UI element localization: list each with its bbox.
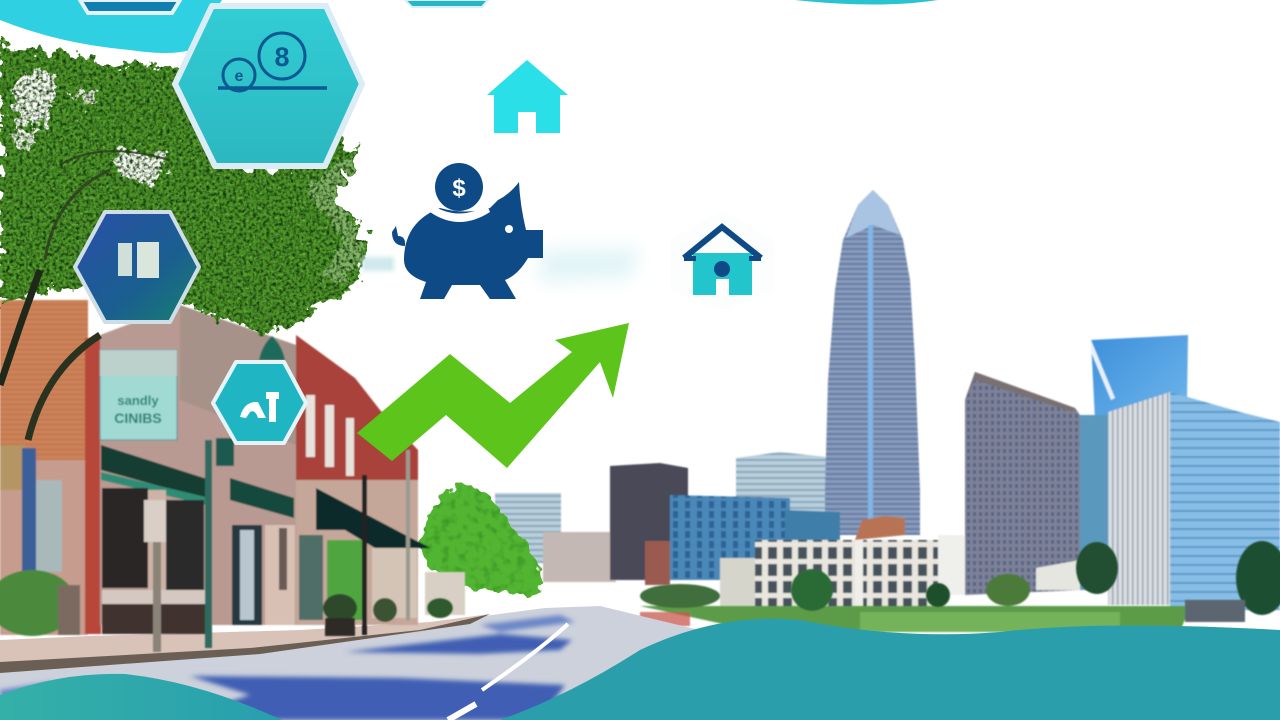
sign post [153, 500, 161, 652]
faint pale smudge left of piggy [362, 257, 394, 271]
corner window [30, 480, 62, 572]
icon: piggy bank [392, 163, 543, 299]
tree trunks [45, 170, 110, 260]
building: low pavilion [1036, 560, 1080, 590]
road shadows [0, 615, 575, 720]
right shop opening [327, 540, 363, 620]
top small hexagon [80, 0, 180, 13]
red brick upper building [296, 335, 418, 490]
road surface [0, 606, 720, 720]
shop sign: CINIBS [114, 410, 162, 426]
storefront row [0, 300, 465, 652]
shop windows [102, 488, 148, 588]
bottom left wave [0, 674, 282, 720]
building: dark tower [610, 463, 688, 580]
road and sidewalk [0, 606, 720, 720]
second awning and door [230, 478, 294, 518]
building: pale glass block [736, 452, 827, 515]
skyline [495, 190, 1280, 610]
lawn [640, 606, 1190, 632]
sidewalk [0, 614, 490, 664]
right lamp post [362, 475, 367, 635]
red pillar and main facade [85, 338, 101, 634]
hexagon: street post [213, 362, 306, 443]
icon: teal house [487, 60, 568, 133]
building: brown low rise [645, 541, 670, 585]
faint pale smudge right of piggy [540, 248, 640, 282]
building: low brick block [543, 532, 616, 582]
top wave band [0, 0, 222, 53]
lane line [482, 624, 568, 690]
curb [0, 614, 490, 673]
icon: house in faint hexagon [670, 210, 775, 312]
icon: building bars [118, 243, 132, 276]
building: angled blue tower [1091, 335, 1188, 420]
tree crown [0, 40, 368, 334]
large tree [0, 40, 368, 440]
shop sign [100, 350, 177, 440]
street tree [420, 484, 545, 596]
coin digit: 8 [274, 42, 290, 72]
skyline trees [791, 569, 833, 611]
building: large blue and white office [1080, 392, 1280, 610]
shop awning [101, 445, 210, 500]
brick corner building [0, 300, 88, 470]
bottom right wave [500, 619, 1280, 720]
upper facade taupe [180, 305, 296, 445]
small coin digit: e [235, 68, 244, 85]
hexagon: coins [175, 6, 362, 166]
building: white grid office [720, 516, 966, 608]
far storefronts [425, 572, 465, 615]
top right ellipse sliver [795, 0, 938, 4]
upper windows [306, 395, 315, 457]
lamp post [205, 440, 212, 648]
building: main skyscraper [825, 190, 920, 535]
top middle hexagon sliver [405, 0, 488, 7]
building: blue glass mid rise [670, 495, 790, 580]
bush [0, 570, 76, 636]
planters [323, 594, 357, 622]
landscaping [640, 541, 1280, 632]
coin: $ [452, 175, 466, 202]
building: far left glass block [495, 493, 561, 563]
icon: coins growing [218, 33, 327, 91]
building: brown glass tower [965, 372, 1080, 595]
dark awning right [316, 488, 430, 548]
arrow: green growth [357, 323, 629, 468]
icon: arch and pillar [240, 402, 266, 418]
hexagon: buildings [75, 212, 199, 322]
coin [430, 163, 490, 222]
shop sign: sandly [117, 393, 159, 408]
